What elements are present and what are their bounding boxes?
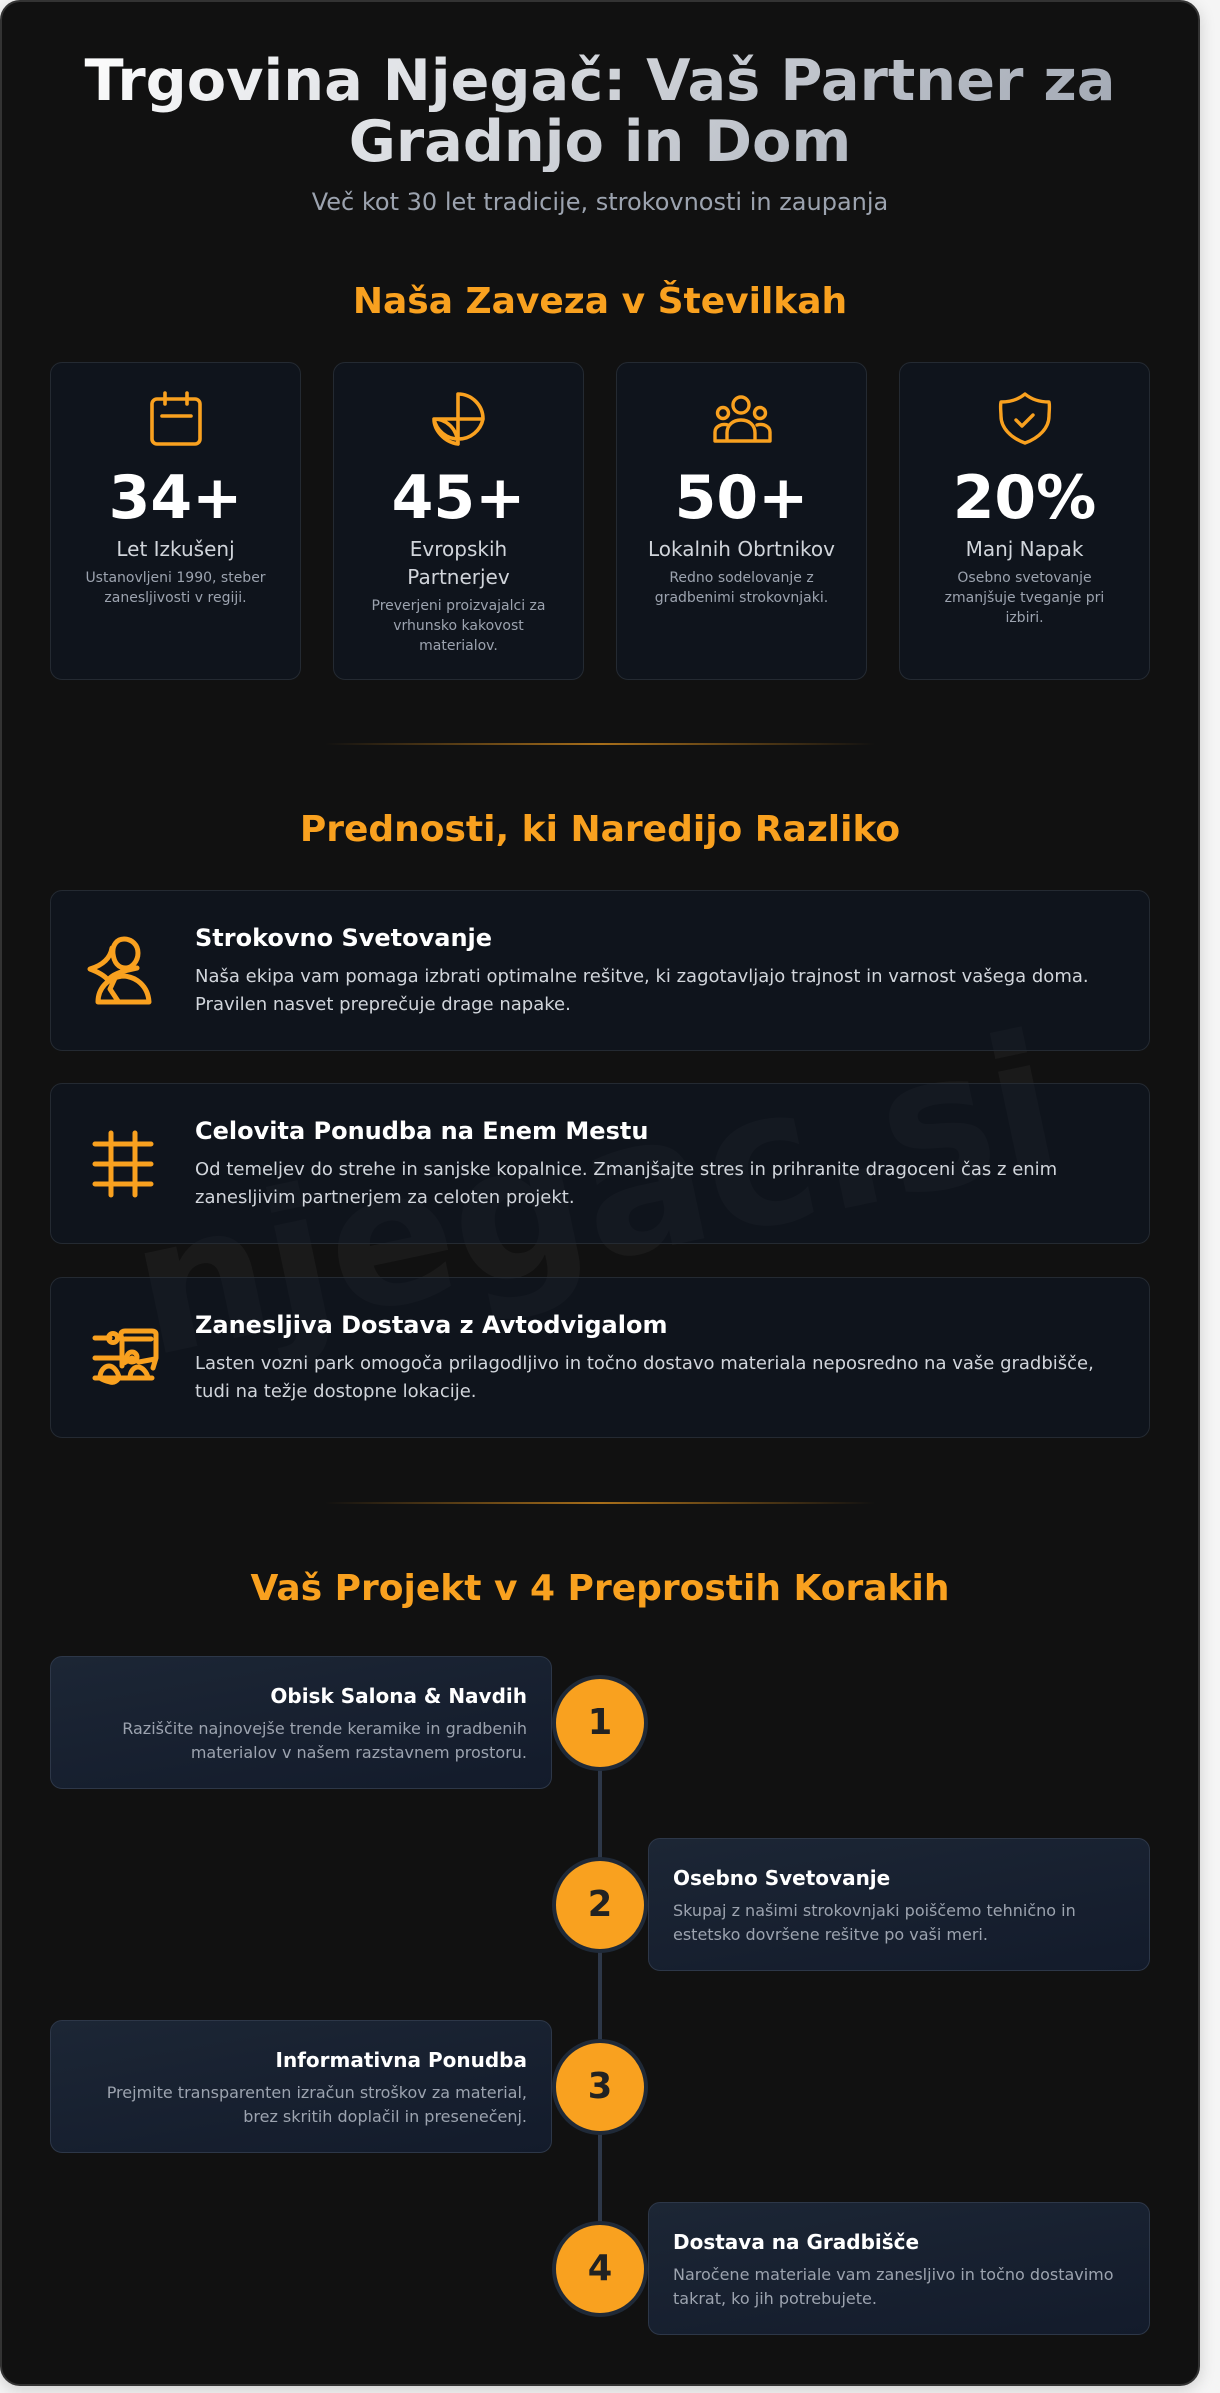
step number 4	[552, 2221, 648, 2317]
advantage text: Lasten vozni park omogoča prilagodljivo in točno dostavo materiala neposredno na vaše gradbišče,	[195, 1353, 1094, 1374]
stat description: zanesljivosti v regiji.	[104, 590, 247, 606]
stat description: materialov.	[419, 638, 498, 654]
stat label: Let Izkušenj	[116, 537, 235, 561]
step text	[673, 1901, 1076, 1944]
advantage title: Strokovno Svetovanje	[195, 924, 492, 952]
icon: advisor	[88, 936, 152, 1004]
stat description	[655, 570, 828, 606]
stat label	[407, 537, 510, 589]
advantage text	[195, 966, 1089, 1015]
panel: advantage 3	[50, 1277, 1150, 1438]
stat description: Ustanovljeni 1990, steber	[85, 570, 266, 586]
heading: steps: Vaš Projekt v 4 Preprostih Korakih	[251, 1568, 949, 1609]
stat description: Preverjeni proizvajalci za	[372, 598, 545, 614]
icon: pie chart	[432, 392, 485, 446]
step number 4: 4	[588, 2248, 612, 2289]
title: Gradnjo in Dom	[349, 108, 851, 174]
icon: users	[713, 395, 772, 443]
stat description	[85, 570, 266, 606]
stat description	[945, 570, 1104, 626]
panel: step 3	[50, 2020, 552, 2153]
stat description: zmanjšuje tveganje pri	[945, 590, 1104, 606]
step text: Prejmite transparenten izračun stroškov za material,	[107, 2083, 527, 2102]
step number 2: 2	[588, 1884, 612, 1925]
stat value: 45+	[392, 463, 525, 533]
step title: Osebno Svetovanje	[673, 1866, 890, 1890]
panel: advantage 1	[50, 890, 1150, 1051]
panel: advantage 2	[50, 1083, 1150, 1244]
step number 1: 1	[588, 1702, 612, 1743]
panel: step 2	[648, 1838, 1150, 1971]
step number 2	[552, 1857, 648, 1953]
stat label: Partnerjev	[407, 565, 510, 589]
step text	[122, 1719, 527, 1762]
stat label: Lokalnih Obrtnikov	[648, 537, 835, 561]
step text	[673, 2265, 1114, 2308]
step number 1	[552, 1675, 648, 1771]
stat description: vrhunsko kakovost	[393, 618, 524, 634]
step title: Obisk Salona & Navdih	[270, 1684, 527, 1708]
step number 3: 3	[588, 2066, 612, 2107]
step text: takrat, ko jih potrebujete.	[673, 2289, 877, 2308]
step text	[107, 2083, 527, 2126]
stat value: 34+	[109, 463, 242, 533]
advantage text: Naša ekipa vam pomaga izbrati optimalne rešitve, ki zagotavljajo trajnost in varnost vašega doma.	[195, 966, 1089, 987]
stat description: Osebno svetovanje	[957, 570, 1092, 586]
title	[50, 51, 1150, 172]
panel: stat 45+	[333, 362, 584, 680]
step text: materialov v našem razstavnem prostoru.	[191, 1743, 527, 1762]
advantage text: zanesljivim partnerjem za celoten projekt.	[195, 1187, 575, 1208]
stat description	[372, 598, 545, 654]
stat value: 20%	[953, 463, 1096, 533]
stat description: izbiri.	[1005, 610, 1044, 626]
panel: stat 20%	[899, 362, 1150, 680]
step text: Naročene materiale vam zanesljivo in točno dostavimo	[673, 2265, 1114, 2284]
advantage title: Celovita Ponudba na Enem Mestu	[195, 1117, 648, 1145]
advantage text: Od temeljev do strehe in sanjske kopalnice. Zmanjšajte stres in prihranite dragoceni čas z enim	[195, 1159, 1057, 1180]
step text: Raziščite najnovejše trende keramike in gradbenih	[122, 1719, 527, 1738]
step text: brez skritih doplačil in presenečenj.	[243, 2107, 527, 2126]
icon: delivery truck	[92, 1328, 158, 1385]
step title: Informativna Ponudba	[276, 2048, 527, 2072]
icon: grid	[92, 1130, 154, 1198]
advantage text	[195, 1159, 1057, 1208]
heading: stats: Naša Zaveza v Številkah	[353, 281, 847, 322]
watermark: njegac.si	[114, 992, 1075, 1399]
stat description: gradbenimi strokovnjaki.	[655, 590, 828, 606]
panel: stat 50+	[616, 362, 867, 680]
panel: step 4	[648, 2202, 1150, 2335]
stat description: Redno sodelovanje z	[669, 570, 814, 586]
step number 3	[552, 2039, 648, 2135]
subtitle: Več kot 30 let tradicije, strokovnosti in zaupanja	[312, 188, 888, 216]
panel: step 1	[50, 1656, 552, 1789]
stat label: Manj Napak	[966, 537, 1083, 561]
icon: shield check	[998, 392, 1052, 445]
stat label: Evropskih	[410, 537, 507, 561]
step text: Skupaj z našimi strokovnjaki poiščemo tehnično in	[673, 1901, 1076, 1920]
advantage text: Pravilen nasvet preprečuje drage napake.	[195, 994, 571, 1015]
timeline line	[598, 1723, 602, 2269]
advantage title: Zanesljiva Dostava z Avtodvigalom	[195, 1311, 667, 1339]
advantage text: tudi na težje dostopne lokacije.	[195, 1381, 477, 1402]
step title: Dostava na Gradbišče	[673, 2230, 919, 2254]
title: Trgovina Njegač: Vaš Partner za	[84, 47, 1116, 114]
advantage text	[195, 1353, 1094, 1402]
icon: calendar	[150, 391, 202, 446]
stat value: 50+	[675, 463, 808, 533]
heading: advantages: Prednosti, ki Naredijo Razliko	[300, 809, 900, 850]
panel: stat 34+	[50, 362, 301, 680]
step text: estetsko dovršene rešitve po vaši meri.	[673, 1925, 988, 1944]
